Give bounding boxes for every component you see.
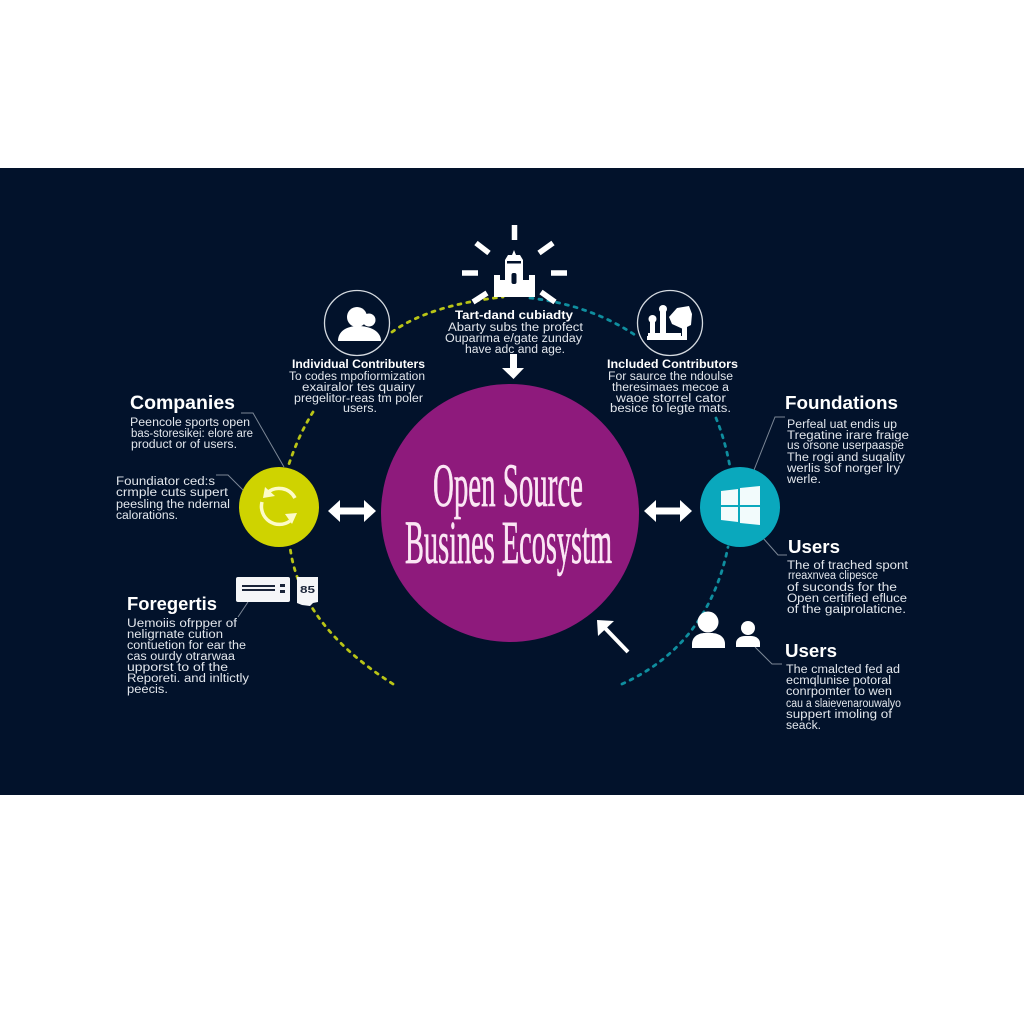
text: foregertis: Uemoiis ofrpper of <box>127 618 238 630</box>
text: users lower: The cmalcted fed ad <box>786 664 900 676</box>
icon: included contributors circle <box>638 290 702 356</box>
icon: two users <box>692 612 760 648</box>
arrow: down into centre <box>502 354 524 379</box>
text: foundiator: peesling the ndernal <box>116 499 230 511</box>
text: individual contributors: users. <box>343 403 377 415</box>
text: users lower: Users <box>785 640 837 661</box>
text: companies: Companies <box>130 392 235 414</box>
text: companies: Peencole sports open <box>130 417 250 429</box>
text: included contributors: Included Contributors <box>607 357 738 371</box>
text: foregertis: Reporeti. and inltictly <box>127 673 249 685</box>
text: users lower: cau a slaievenarouwalyo <box>786 698 901 710</box>
top centre text block: have adc and age. <box>465 344 565 356</box>
top centre text block: Abarty subs the profect <box>448 322 584 334</box>
text: users lower: conrpomter to wen <box>786 686 892 698</box>
leader lines <box>216 413 787 664</box>
text: users upper: Users <box>788 536 840 557</box>
arrow: left double <box>328 500 376 522</box>
text: foregertis: neligrnate cution <box>127 629 223 641</box>
central circle: Busines Ecosystm <box>405 510 612 577</box>
dark background panel <box>0 168 1024 795</box>
text: users lower: seack. <box>786 720 821 732</box>
text: companies: bas-storesikei: elore are <box>131 428 253 440</box>
text: foundations: Tregatine irare fraige <box>787 430 909 442</box>
text: foundations: Perfeal uat endis up <box>787 419 897 431</box>
text: users upper <box>787 536 909 616</box>
text: users lower <box>785 640 901 732</box>
text: foundations: Foundations <box>785 392 898 413</box>
text: included contributors: besice to legte mats. <box>610 403 731 415</box>
central title: Open Source <box>433 453 583 520</box>
text: foregertis: peecis. <box>127 684 168 696</box>
text: foregertis: contuetion for ear the <box>127 640 246 652</box>
text: foundations: werlis sof norger lry <box>786 463 900 475</box>
icon: server and document: 85 <box>300 585 316 596</box>
text: foundations: werle. <box>786 474 821 486</box>
yellow node with refresh icon <box>239 467 319 547</box>
text: included contributors <box>607 357 738 415</box>
icon: individual contributors circle <box>324 290 390 356</box>
text: individual contributors: Individual Contributers <box>292 357 425 371</box>
text: users lower: suppert imoling of <box>786 709 893 721</box>
text: individual contributors <box>289 357 425 415</box>
arrow: right double <box>644 500 692 522</box>
text: foundations <box>785 392 909 486</box>
text: users upper: of suconds for the <box>787 582 897 594</box>
dashed ring: yellow left arc <box>288 297 503 684</box>
text: included contributors: For saurce the ndoulse <box>608 371 733 383</box>
top centre text block: Ouparima e/gate zunday <box>445 333 582 345</box>
text: foundiator: calorations. <box>116 510 178 522</box>
text: foregertis: upporst to of the <box>127 662 228 674</box>
dashed ring: teal right arc <box>530 298 730 684</box>
text: companies: product or of users. <box>131 439 237 451</box>
text: users upper: rreaxnvea clipesce <box>788 570 878 582</box>
top centre text block: Tart-dand cubiadty <box>455 308 573 322</box>
text: included contributors: theresimaes mecoe a <box>612 382 730 394</box>
central circle <box>381 384 639 642</box>
central title <box>405 453 612 577</box>
text: users upper: The of trached spont <box>787 560 909 572</box>
text: foundiator: crmple cuts supert <box>116 487 229 499</box>
text: included contributors: waoe storrel cator <box>615 393 726 405</box>
text: individual contributors: pregelitor-reas tm poler <box>294 393 423 405</box>
text: foundations: The rogi and suqality <box>787 452 905 464</box>
icon: server and document <box>236 577 318 606</box>
text: foregertis: Foregertis <box>127 593 217 614</box>
text: individual contributors: To codes mpofiormization <box>289 371 425 383</box>
text: users lower: ecmqlunise potoral <box>786 675 891 687</box>
text: foundiator <box>116 476 230 522</box>
text: foregertis <box>127 593 249 696</box>
arrow: diagonal toward centre <box>597 620 628 652</box>
teal node with window icon <box>700 467 780 547</box>
text: users upper: Open certified efluce <box>787 593 907 605</box>
text: foundiator: Foundiator ced:s <box>116 476 215 488</box>
text: foundations: us orsone userpaaspe <box>787 440 904 452</box>
text: users upper: of the gaiprolaticne. <box>787 604 906 616</box>
top centre text block <box>445 308 584 356</box>
text: individual contributors: exairalor tes quairy <box>302 382 415 394</box>
icon: top building with rays <box>462 225 567 302</box>
text: companies <box>130 392 253 451</box>
text: foregertis: cas ourdy otrarwaa <box>127 651 236 663</box>
